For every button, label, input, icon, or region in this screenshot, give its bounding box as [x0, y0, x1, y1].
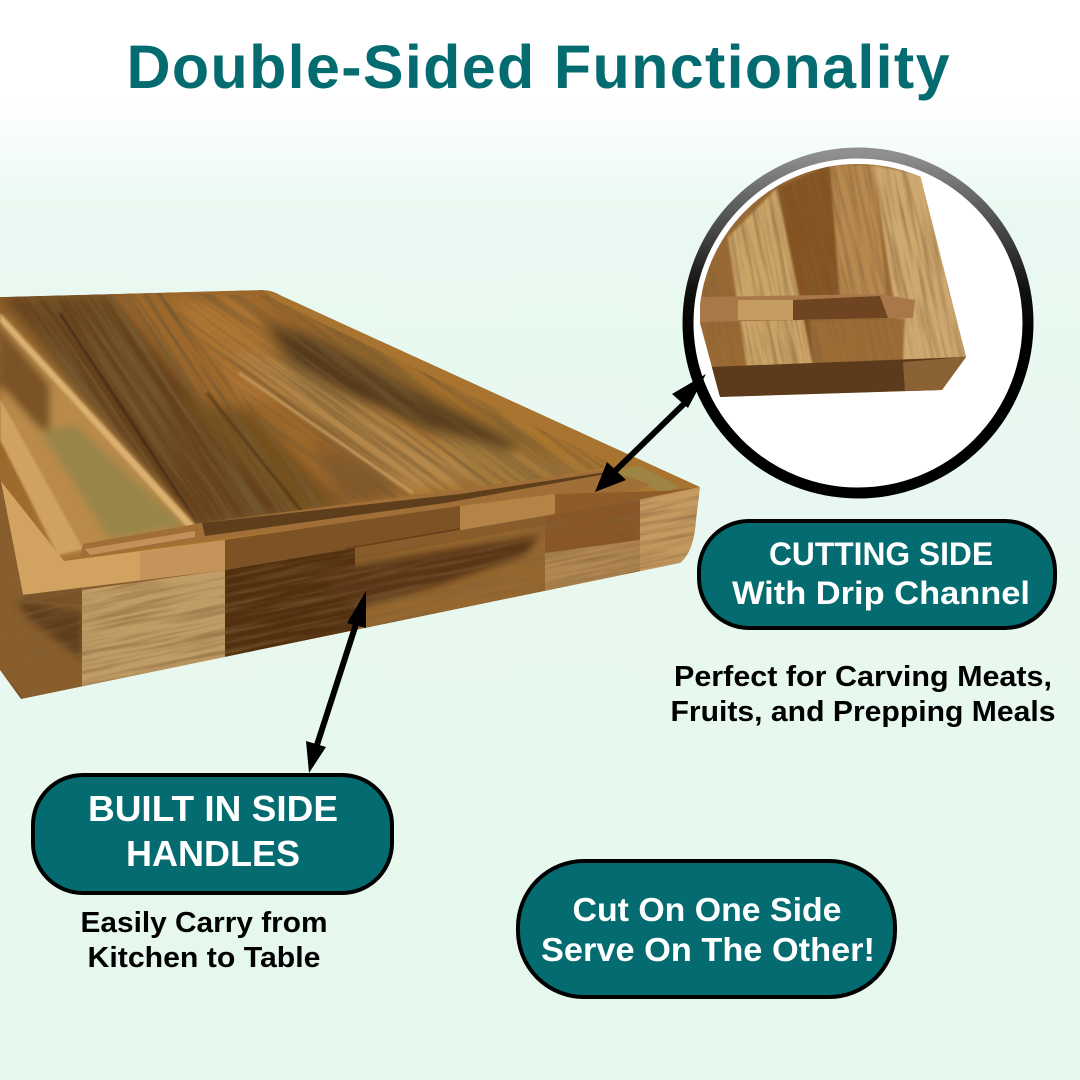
- end grain texture: [22, 495, 699, 687]
- dark grain lines: [60, 313, 413, 522]
- lens wood detail: [700, 164, 966, 397]
- cutting board photo: [0, 290, 700, 699]
- arrow: handle to label: [306, 591, 366, 773]
- caption: handles: Easily Carry from: [80, 907, 328, 939]
- pill: cutting side: [699, 521, 1055, 628]
- caption: cutting side: Fruits, and Prepping Meals: [670, 696, 1056, 728]
- board front face: [0, 478, 700, 699]
- pill: cut on one side serve on the other: [518, 861, 895, 997]
- grain: left part of top: [0, 293, 330, 524]
- pill: built in side handles: [33, 775, 392, 893]
- pill: built in side handles: HANDLES: [126, 833, 300, 874]
- left light band: [0, 313, 197, 557]
- pill: cut on one side serve on the other: Serve On The Other!: [541, 931, 875, 968]
- pill subheading: drip channel: With Drip Channel: [732, 575, 1030, 611]
- lens ring: [688, 153, 1028, 493]
- caption: cutting side: [670, 661, 1056, 728]
- right rim: [262, 290, 700, 491]
- drip channel groove: [80, 470, 650, 558]
- pill heading: cutting side: CUTTING SIDE: [769, 536, 993, 572]
- front lip strips: [0, 480, 225, 595]
- caption: handles: Kitchen to Table: [88, 942, 320, 974]
- caption: cutting side: Perfect for Carving Meats,: [674, 661, 1052, 693]
- title: Double-Sided Functionality: [126, 33, 950, 101]
- caption: handles: [80, 907, 328, 974]
- arrow: lens to drip channel: [595, 374, 706, 492]
- board top surface: [0, 290, 700, 595]
- pill: cut on one side serve on the other: Cut On One Side: [572, 891, 842, 928]
- grain: right part of top: [176, 294, 614, 504]
- pill: built in side handles: BUILT IN SIDE: [88, 788, 338, 829]
- zoom lens circle: [682, 148, 1034, 498]
- lens wood grain: [702, 164, 966, 396]
